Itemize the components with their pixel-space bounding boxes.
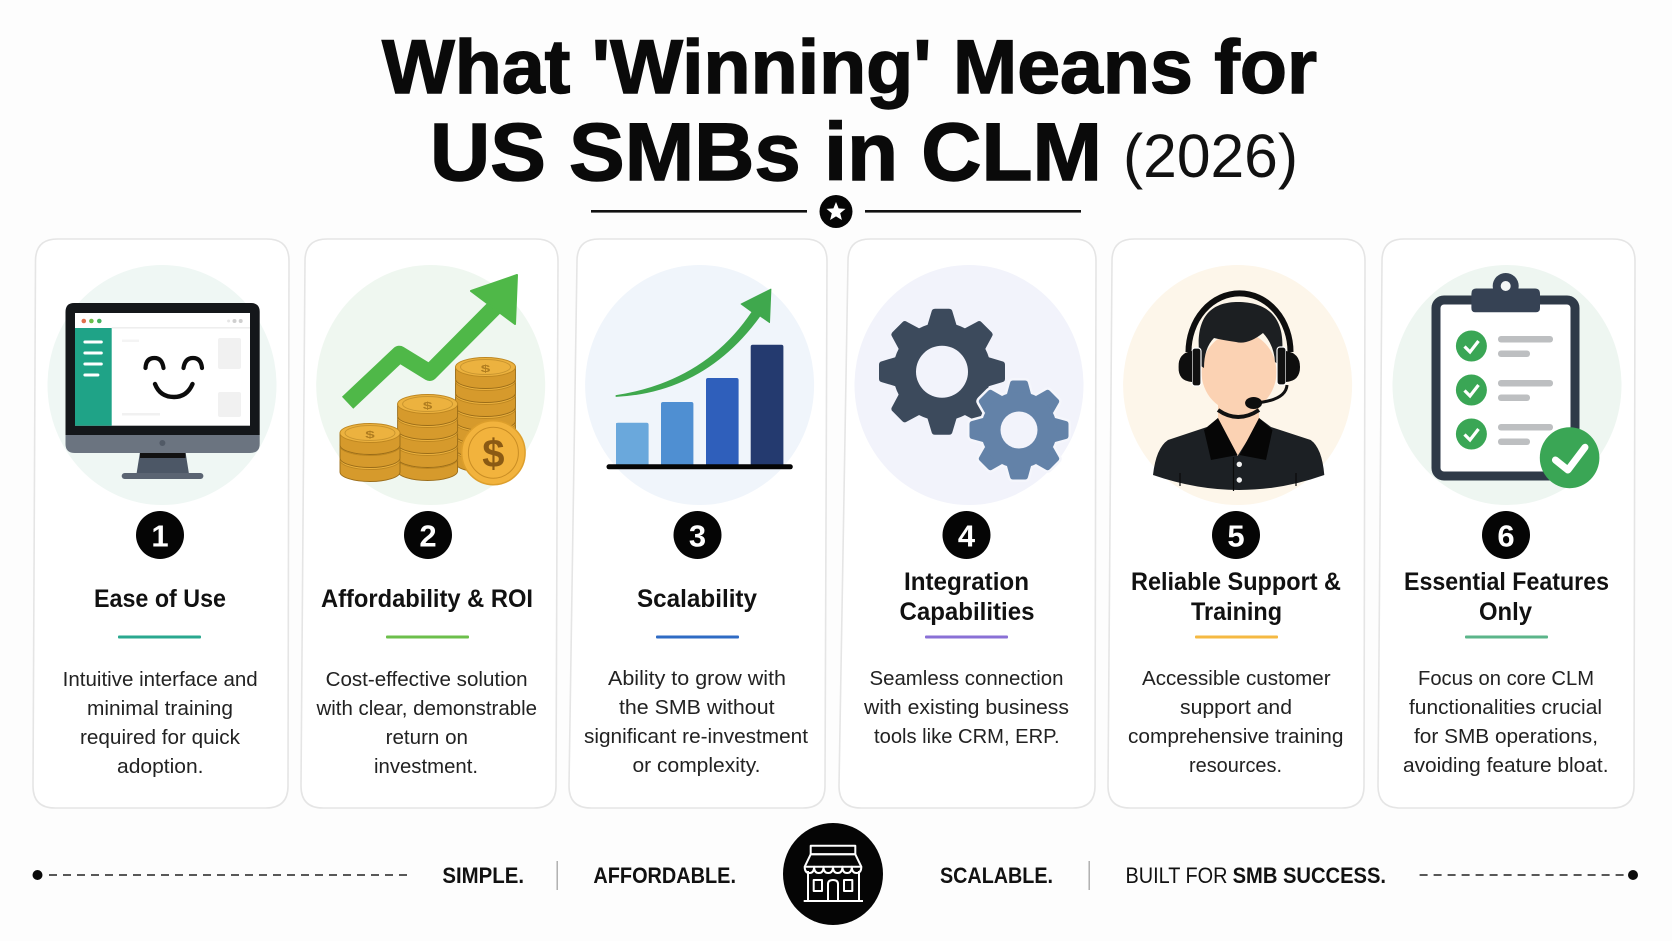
description: Focus on core CLM: [1418, 667, 1594, 690]
heading: reliable support and training: Reliable Support &: [1131, 568, 1341, 596]
icon: computer monitor with smile: [48, 265, 276, 505]
icon: storefront badge: [783, 823, 883, 925]
accent underline: [1195, 636, 1278, 638]
description: minimal training: [87, 697, 233, 720]
icon: checklist clipboard: [1392, 265, 1622, 505]
description: functionalities crucial: [1409, 696, 1602, 719]
title: [382, 25, 1317, 198]
description: with existing business: [863, 696, 1069, 719]
accent underline: [386, 636, 469, 638]
description: or complexity.: [632, 754, 760, 777]
heading: ease of use: Ease of Use: [94, 585, 226, 613]
description: for SMB operations,: [1414, 725, 1598, 748]
number badge 2: 2: [419, 518, 437, 554]
description: [1403, 667, 1608, 777]
description: return on: [386, 726, 468, 749]
description: significant re-investment: [584, 725, 808, 748]
tagline: scalable: SCALABLE.: [940, 863, 1053, 888]
number badge 4: [942, 511, 990, 559]
panel: scalability: [569, 239, 827, 808]
accent underline: [1465, 636, 1548, 638]
tagline: built for SMB success: SMB SUCCESS.: [1233, 863, 1386, 888]
heading: integration capabilities: [900, 568, 1034, 626]
description: avoiding feature bloat.: [1403, 754, 1608, 777]
tagline: built for SMB success: BUILT FOR: [1126, 863, 1228, 888]
tagline: simple: SIMPLE.: [442, 863, 524, 888]
description: support and: [1180, 696, 1292, 719]
number badge 3: [674, 511, 722, 559]
accent underline: [118, 636, 201, 638]
heading: essential features only: Essential Features: [1404, 568, 1609, 596]
panel: essential features only: [1378, 239, 1635, 808]
panel: reliable support and training: [1108, 239, 1365, 808]
description: Ability to grow with: [608, 667, 786, 690]
description: investment.: [374, 755, 478, 778]
heading: reliable support and training: Training: [1191, 598, 1282, 626]
description: Accessible customer: [1142, 667, 1331, 690]
number badge 4: 4: [958, 518, 976, 554]
accent underline: [925, 636, 1008, 638]
description: comprehensive training: [1128, 725, 1344, 748]
icon: gears: [854, 265, 1084, 505]
tagline: built for SMB success: [1126, 863, 1386, 888]
description: [63, 668, 258, 778]
description: adoption.: [117, 755, 204, 778]
description: Intuitive interface and: [63, 668, 258, 691]
heading: integration capabilities: Capabilities: [900, 598, 1034, 626]
number badge 1: [136, 511, 184, 559]
heading: affordability and ROI: Affordability & ROI: [321, 585, 533, 613]
description: [863, 667, 1069, 748]
panel: affordability and ROI: [301, 239, 558, 808]
description: required for quick: [80, 726, 241, 749]
number badge 5: [1212, 511, 1260, 559]
number badge 5: 5: [1227, 518, 1245, 554]
description: Cost-effective solution: [326, 668, 528, 691]
icon: coin stacks and rising arrow: [316, 265, 545, 505]
heading: integration capabilities: Integration: [904, 568, 1029, 596]
icon: coin stacks and rising arrow: $: [482, 432, 505, 476]
heading: essential features only: Only: [1479, 598, 1532, 626]
number badge 3: 3: [689, 518, 706, 554]
title: What 'Winning' Means for: [382, 25, 1317, 110]
description: with clear, demonstrable: [316, 697, 537, 720]
description: [584, 667, 808, 777]
description: resources.: [1189, 754, 1282, 777]
description: [316, 668, 537, 778]
icon: coin stacks and rising arrow: $: [423, 400, 433, 411]
footer tagline: [32, 823, 1638, 925]
description: tools like CRM, ERP.: [874, 725, 1060, 748]
heading: essential features only: [1404, 568, 1609, 626]
dashed connector left: [32, 870, 411, 880]
icon: support agent with headset: [1123, 265, 1352, 505]
icon: growth bar chart: [585, 265, 814, 505]
title: US SMBs in CLM: [430, 107, 1102, 198]
title: (2026): [1123, 122, 1298, 190]
description: the SMB without: [619, 696, 775, 719]
tagline: affordable: AFFORDABLE.: [593, 863, 736, 888]
panel: ease of use: [33, 239, 289, 808]
title divider with star: [591, 195, 1081, 228]
heading: scalability: Scalability: [637, 585, 757, 613]
dashed connector right: [1420, 870, 1638, 880]
number badge 6: [1482, 511, 1530, 559]
accent underline: [656, 636, 739, 638]
description: [1128, 667, 1344, 777]
number badge 2: [404, 511, 452, 559]
panel: integration capabilities: [839, 239, 1096, 808]
description: Seamless connection: [870, 667, 1064, 690]
heading: reliable support and training: [1131, 568, 1341, 626]
number badge 1: 1: [151, 518, 169, 554]
icon: coin stacks and rising arrow: $: [481, 363, 490, 374]
number badge 6: 6: [1497, 518, 1515, 554]
icon: coin stacks and rising arrow: $: [365, 429, 375, 440]
